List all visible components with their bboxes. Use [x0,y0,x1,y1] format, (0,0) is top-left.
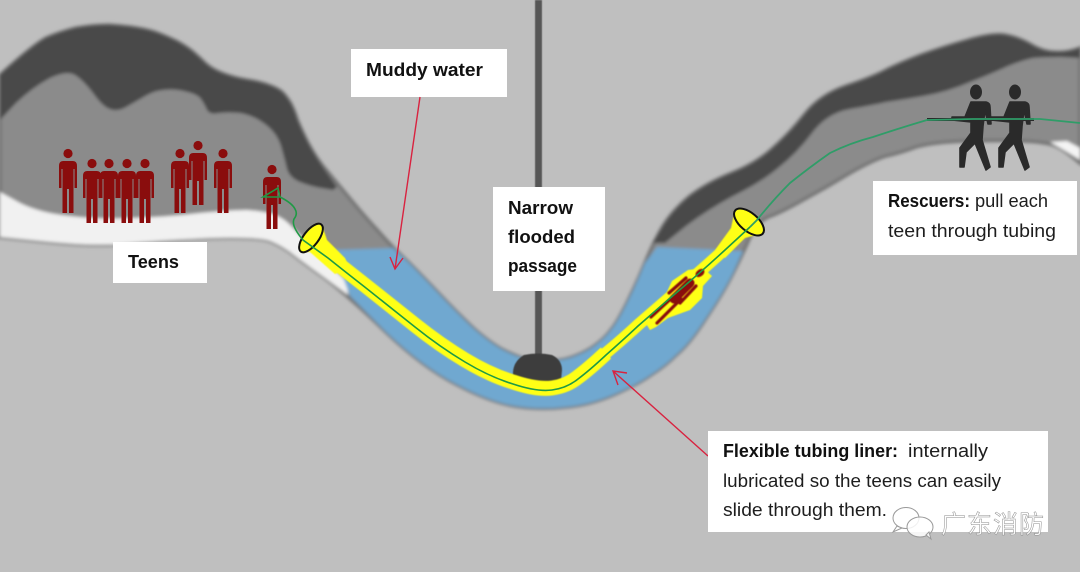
label: rescuers: teen through tubing [888,221,1056,241]
cave terrain [0,25,1080,408]
tube right section [600,229,745,359]
bulge around teen [645,268,712,330]
teen [83,159,101,223]
pull bar [927,118,1034,121]
right flare [715,210,763,258]
label: rescuers [873,181,1077,255]
label: narrow flooded passage: passage [508,256,577,276]
right dark ceiling band [653,35,1080,243]
central shaft [535,0,542,360]
label: flexible tubing liner: internally [908,441,988,461]
label: teens: Teens [128,252,179,272]
label: muddy water [351,49,507,97]
label: flexible tubing liner: slide through them. [723,500,887,520]
torso [674,283,690,299]
teen [136,159,154,223]
floor right [1050,141,1080,160]
icon: wechat [893,508,933,539]
label: narrow flooded passage: Narrow [508,198,574,218]
rescuer one [952,84,991,170]
right tube mouth [729,204,769,240]
teen [100,159,118,223]
label: narrow flooded passage [493,187,605,291]
label: muddy water: Muddy water [366,60,483,80]
label: flexible tubing liner: lubricated so the teens can easily [723,471,1001,491]
watermark text: 广东消防 [941,511,1044,539]
tube left and bottom section [313,245,606,388]
teen [59,149,77,213]
teen [118,159,136,223]
rescuers [927,84,1034,170]
yellow tubing liner [300,210,763,388]
limbs [651,278,696,323]
left flare [300,225,350,274]
arrow: tubing liner [613,371,708,456]
label: rescuers: pull each [975,191,1048,211]
teen [189,141,207,205]
label: rescuers: Rescuers: [888,191,970,211]
floor left [0,192,348,295]
left tube mouth [295,220,327,256]
shaft blockage [513,354,562,384]
rescuer two [991,84,1030,170]
arrow: muddy water [390,97,420,269]
teen inside tube [651,267,706,323]
label: narrow flooded passage: flooded [508,227,575,247]
teens group [59,141,281,229]
label: flexible tubing liner: Flexible tubing liner: [723,441,898,461]
left dark ceiling band [0,25,337,190]
teen [171,149,189,213]
muddy water [333,247,743,408]
label: teens [113,242,207,283]
green rope to rescuers [750,119,1080,227]
label: flexible tubing liner [708,431,1048,532]
green rope through tube [263,188,750,390]
cave passage body [0,25,1080,408]
head [694,267,706,279]
teen being harnessed [263,165,281,229]
teen [214,149,232,213]
watermark [893,508,1044,539]
